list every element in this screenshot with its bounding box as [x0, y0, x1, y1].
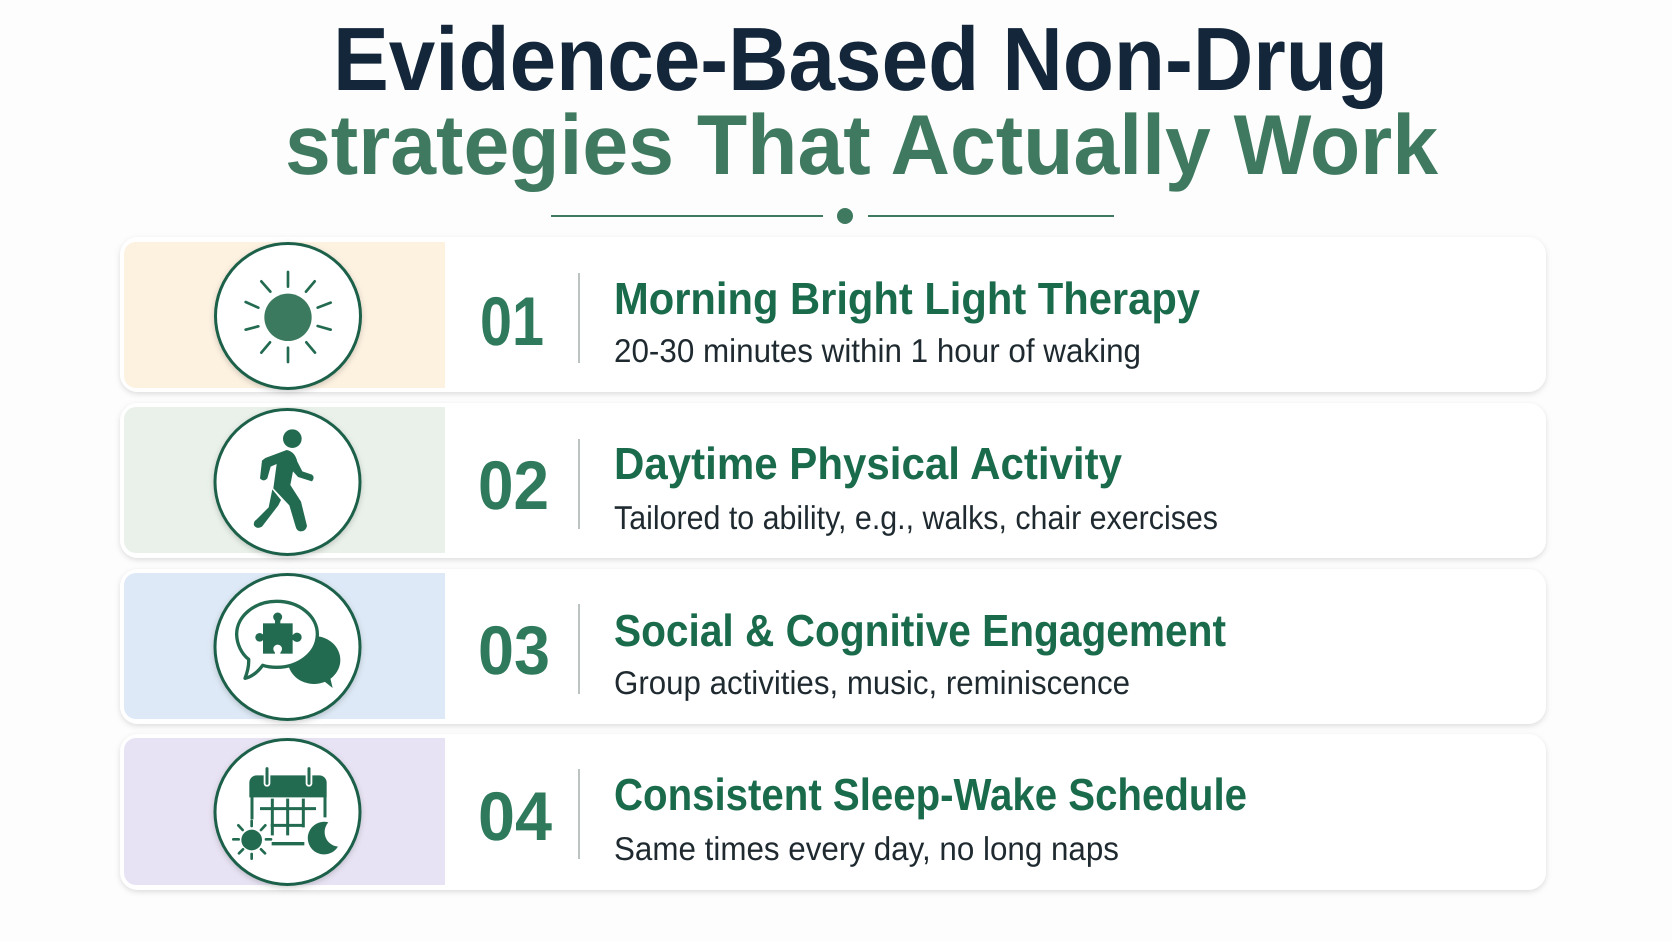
- icon: speech bubbles with puzzle piece: [215, 574, 360, 720]
- icon: walking person: [215, 410, 360, 554]
- colour panel: [124, 738, 445, 885]
- colour panel: [124, 242, 445, 388]
- card 2: daytime physical activity: [120, 403, 1546, 558]
- card background: [120, 237, 1546, 392]
- colour panel: [124, 407, 445, 553]
- heading: Morning Bright Light Therapy: [614, 273, 1200, 324]
- card 3: social and cognitive engagement: [120, 569, 1546, 724]
- card background: [120, 403, 1546, 558]
- number 04: 04: [478, 778, 552, 855]
- separator: [578, 604, 580, 694]
- icon: calendar with sun and moon: [215, 740, 360, 884]
- description: Tailored to ability, e.g., walks, chair exercises: [614, 499, 1218, 536]
- number 02: 02: [478, 447, 549, 524]
- description: 20-30 minutes within 1 hour of waking: [614, 332, 1141, 369]
- number 01: 01: [480, 283, 544, 360]
- card background: [120, 569, 1546, 724]
- title divider: [551, 208, 1114, 224]
- card background: [120, 734, 1546, 890]
- separator: [578, 769, 580, 859]
- heading: Social & Cognitive Engagement: [614, 605, 1226, 656]
- description: Group activities, music, reminiscence: [614, 664, 1130, 701]
- number 03: 03: [478, 612, 550, 689]
- card 4: consistent sleep-wake schedule: [120, 734, 1546, 890]
- title line 1: Evidence-Based Non-Drug: [333, 10, 1388, 110]
- separator: [578, 439, 580, 529]
- description: Same times every day, no long naps: [614, 830, 1119, 867]
- heading: Daytime Physical Activity: [614, 438, 1122, 489]
- icon: sun: [216, 244, 360, 388]
- heading: Consistent Sleep-Wake Schedule: [614, 769, 1247, 820]
- colour panel: [124, 573, 445, 719]
- separator: [578, 273, 580, 363]
- title line 2: strategies That Actually Work: [285, 98, 1439, 193]
- title: [285, 10, 1439, 193]
- card 1: morning bright light therapy: [120, 237, 1546, 392]
